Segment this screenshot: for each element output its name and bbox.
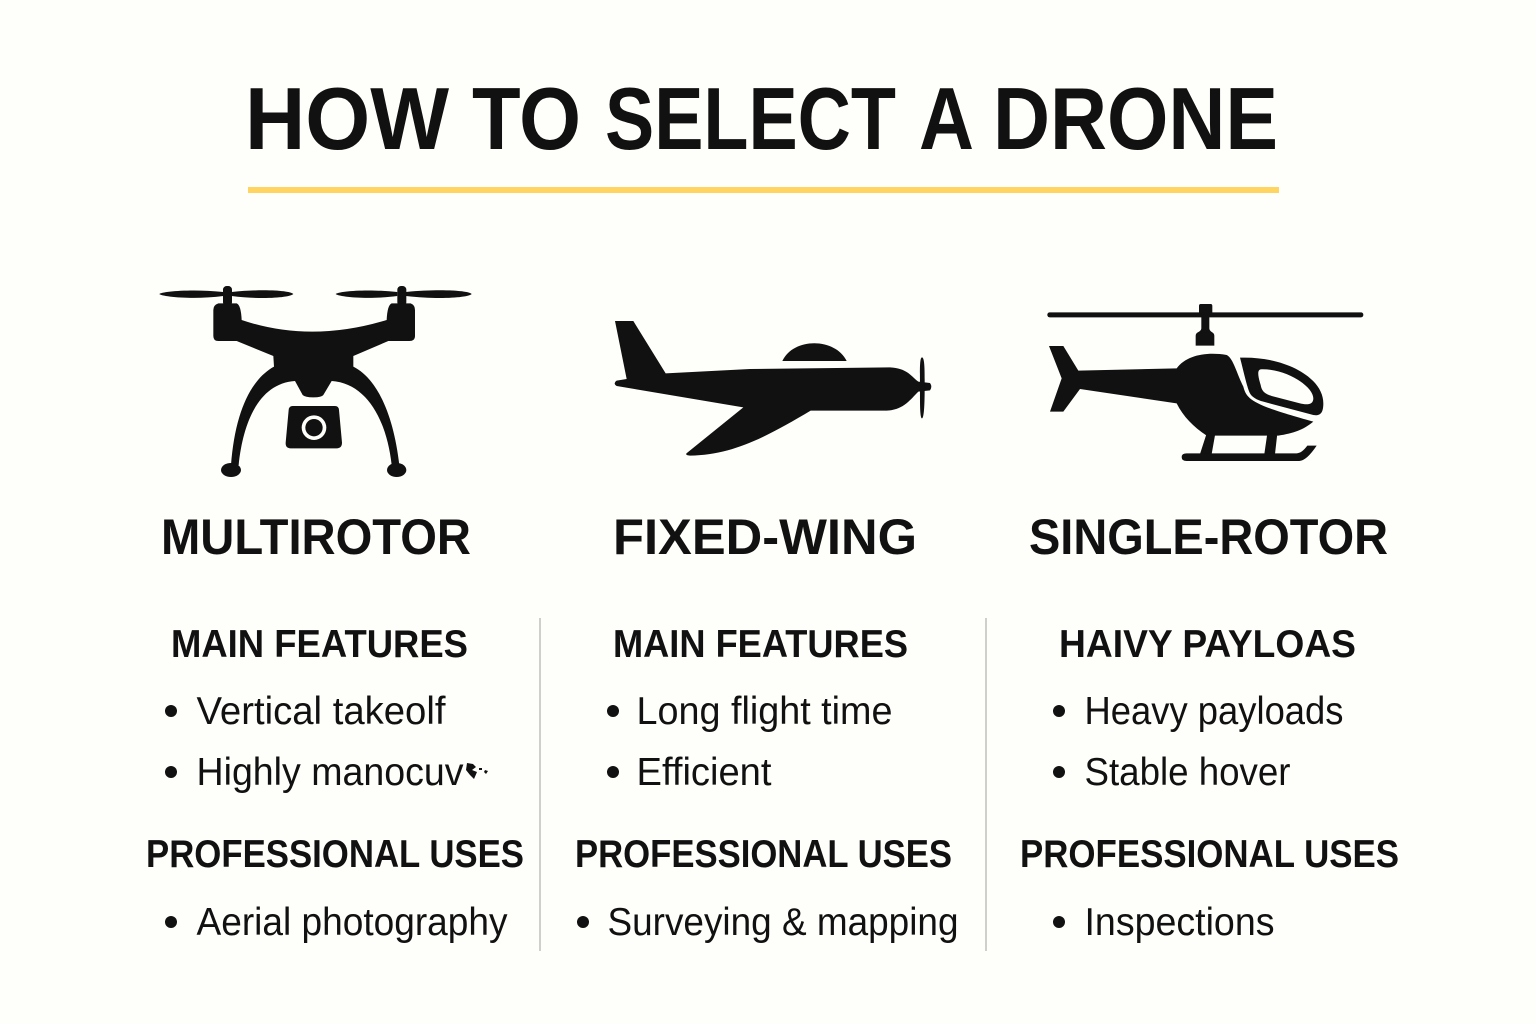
- section heading: professional uses: PROFESSIONAL USES: [1020, 833, 1399, 876]
- section heading: main features: MAIN FEATURES: [613, 623, 908, 666]
- section heading: professional uses: PROFESSIONAL USES: [575, 833, 952, 876]
- title: TO: [472, 69, 581, 168]
- title: A: [919, 69, 974, 168]
- heading: fixed-wing: FIXED-WING: [613, 509, 917, 565]
- panel: fixed-wing: [575, 321, 958, 944]
- icon: multirotor drone: [159, 286, 472, 477]
- bullet: long flight time: Long flight time: [636, 690, 892, 733]
- bullet: vertical takeoff: Vertical takeolf: [196, 690, 446, 733]
- title underline: [248, 187, 1279, 193]
- panel: single-rotor: [1020, 304, 1399, 944]
- bullet: aerial photography: Aerial photography: [196, 901, 508, 944]
- heading: multirotor: MULTIROTOR: [161, 509, 471, 565]
- section heading: heavy payloads, garbled: HAIVY PAYLOAS: [1059, 623, 1356, 666]
- section heading: main features: MAIN FEATURES: [171, 623, 468, 666]
- panel: multirotor: [146, 286, 524, 944]
- bullet: highly maneuverable, with garbled ending: Highly manocuv: [196, 751, 464, 794]
- icon: single-rotor helicopter: [1047, 304, 1363, 461]
- bullet: inspections: Inspections: [1084, 901, 1274, 944]
- section heading: professional uses: PROFESSIONAL USES: [146, 833, 524, 876]
- title: SELECT: [605, 69, 896, 168]
- bullet: surveying and mapping: Surveying & mapping: [608, 901, 958, 944]
- bullet: heavy payloads: Heavy payloads: [1084, 690, 1344, 733]
- title: DRONE: [993, 69, 1278, 168]
- title: [245, 69, 1278, 168]
- title: HOW: [245, 69, 449, 168]
- icon: fixed-wing plane: [615, 321, 931, 456]
- bullet: stable hover: Stable hover: [1084, 751, 1291, 794]
- heading: single-rotor: SINGLE-ROTOR: [1029, 509, 1388, 565]
- bullet: efficient: Efficient: [636, 751, 772, 794]
